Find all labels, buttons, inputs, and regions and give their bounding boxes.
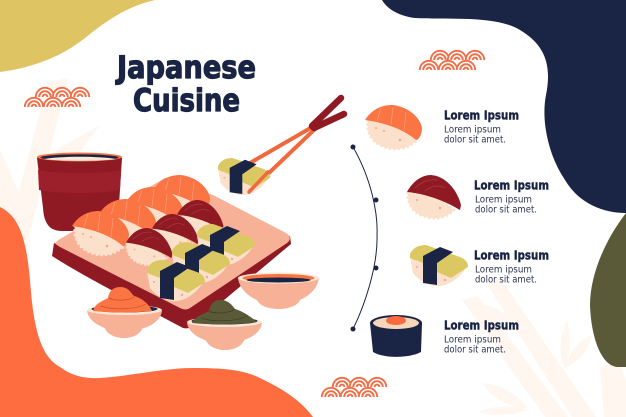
title: Japanese [115,50,256,86]
olive blob [590,213,626,367]
wave pattern: left [24,87,90,107]
item 1 text: Lorem ipsum [444,124,501,136]
orange blob [0,207,313,417]
soy sauce bowl [238,272,319,309]
item 1 text: dolor sit amet. [444,134,506,146]
yellow blob [0,0,155,72]
item 2 text: Lorem Ipsum [474,178,549,192]
title [115,50,256,119]
bamboo decoration: left [0,78,110,240]
item 4 text [444,318,519,356]
item 2 text: Lorem ipsum [475,194,532,206]
chopstick tip [249,172,268,192]
icon: maki roll [370,315,422,357]
cup [37,152,122,231]
tuna nigiri on tray [126,200,223,265]
icon: salmon nigiri [365,105,422,149]
icon: tamago nigiri [410,245,468,286]
item 3 text [474,248,549,286]
icon: tuna nigiri [407,175,461,218]
wasabi bowl [187,300,262,350]
item 3 text: Lorem Ipsum [474,248,549,262]
item 1 text [444,108,519,146]
item 4 text: dolor sit amet. [444,344,506,356]
chopsticks [249,98,344,192]
wave pattern: bottom [321,377,387,397]
item 4 text: Lorem Ipsum [444,318,519,332]
item 3 text: dolor sit amet. [475,274,537,286]
timeline [350,144,378,332]
item 2 text: dolor sit amet. [475,204,537,216]
item 1 text: Lorem Ipsum [444,108,519,122]
bamboo decoration: right [462,278,626,417]
item 3 text: Lorem ipsum [475,264,532,276]
item 2 text [474,178,549,216]
ginger bowl [87,287,162,338]
wave pattern: top right [419,50,485,70]
sushi held by chopsticks [218,158,270,195]
item 4 text: Lorem ipsum [444,334,501,346]
tray [52,178,291,328]
title: Cuisine [133,83,240,119]
salmon nigiri on tray [72,175,210,255]
navy blob [382,0,626,213]
tamago nigiri on tray [147,224,255,301]
